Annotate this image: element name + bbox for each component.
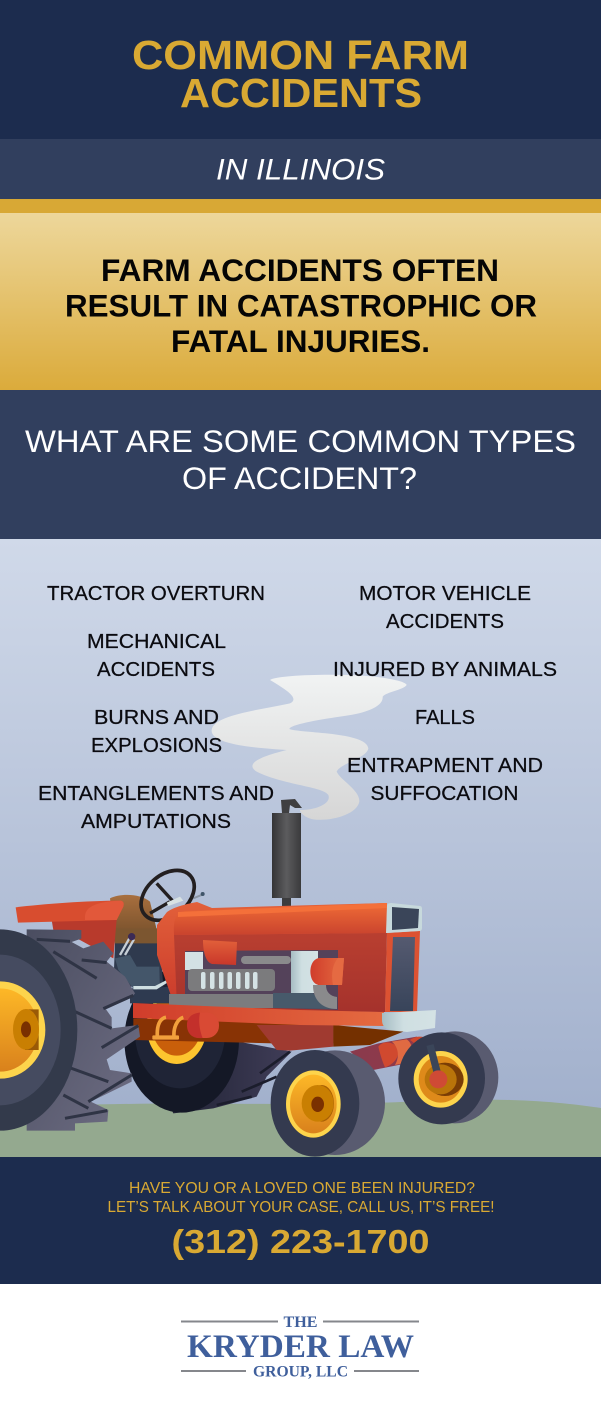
accident list: right column	[333, 583, 557, 805]
statement text: FARM ACCIDENTS OFTEN	[101, 252, 499, 288]
accident list: left column: EXPLOSIONS	[91, 735, 222, 757]
subtitle: IN ILLINOIS	[216, 154, 385, 186]
title: COMMON FARM	[132, 32, 469, 78]
law firm name: THE	[284, 1314, 318, 1331]
tractor hood	[157, 902, 387, 1012]
accident list: left column: BURNS AND	[94, 707, 219, 729]
front bumper	[133, 1003, 384, 1026]
panel: illustrated scene	[0, 539, 601, 1157]
bumper end cap	[382, 1010, 436, 1032]
statement text	[65, 252, 537, 359]
panel: logo	[0, 1284, 601, 1414]
accident list: right column: INJURED BY ANIMALS	[333, 659, 557, 681]
panel: question band	[0, 390, 601, 539]
statement text: FATAL INJURIES.	[171, 323, 430, 359]
panel: call to action	[0, 1157, 601, 1284]
accident list: left column	[38, 583, 274, 833]
steering wheel	[131, 860, 205, 930]
tread grooves	[37, 939, 138, 1118]
accident list: right column: FALLS	[415, 707, 475, 729]
accident list: left column: ACCIDENTS	[97, 659, 215, 681]
accident list: right column: SUFFOCATION	[370, 783, 518, 805]
near front wheel	[271, 1050, 385, 1157]
exhaust stack	[272, 799, 302, 909]
call to action text	[108, 1180, 494, 1216]
seat	[110, 895, 163, 987]
title	[132, 32, 469, 116]
law firm name: KRYDER LAW	[187, 1329, 414, 1365]
front axle	[350, 1037, 434, 1070]
phone number: (312) 223-1700	[172, 1223, 430, 1260]
panel: gold statement	[0, 213, 601, 390]
accident list: left column: MECHANICAL	[87, 631, 226, 653]
far front wheel	[398, 1031, 498, 1124]
grille	[188, 969, 275, 991]
panel: subtitle band	[0, 139, 601, 199]
call to action text: HAVE YOU OR A LOVED ONE BEEN INJURED?	[129, 1180, 475, 1197]
accident list: left column: AMPUTATIONS	[81, 811, 231, 833]
near rear wheel	[0, 929, 140, 1131]
hill	[0, 1100, 601, 1157]
accident list: right column: MOTOR VEHICLE	[359, 583, 531, 605]
statement text: RESULT IN CATASTROPHIC OR	[65, 288, 537, 324]
tow hook and red knob	[152, 1013, 219, 1040]
engine bay	[169, 940, 344, 1010]
smoke	[212, 675, 407, 820]
gear levers and step	[115, 933, 177, 1003]
law firm name	[187, 1314, 414, 1380]
law firm name: GROUP, LLC	[253, 1364, 348, 1380]
question heading: OF ACCIDENT?	[182, 460, 417, 496]
logo rules	[181, 1320, 419, 1372]
under-frame	[133, 1018, 403, 1051]
rear fender	[16, 901, 124, 958]
question heading: WHAT ARE SOME COMMON TYPES	[25, 423, 576, 459]
accident list: right column: ACCIDENTS	[386, 611, 504, 633]
far rear wheel	[124, 967, 292, 1113]
call to action text: LET’S TALK ABOUT YOUR CASE, CALL US, IT’S FREE!	[108, 1199, 494, 1216]
title: ACCIDENTS	[180, 70, 422, 116]
accident list: left column: TRACTOR OVERTURN	[47, 583, 265, 605]
accident list: right column: ENTRAPMENT AND	[347, 755, 543, 777]
tractor nose and headlight	[385, 903, 422, 1012]
question heading	[25, 423, 576, 496]
tread silhouette	[27, 929, 140, 1131]
accident list: left column: ENTANGLEMENTS AND	[38, 783, 274, 805]
panel: title header	[0, 0, 601, 139]
tractor illustration	[0, 799, 498, 1157]
